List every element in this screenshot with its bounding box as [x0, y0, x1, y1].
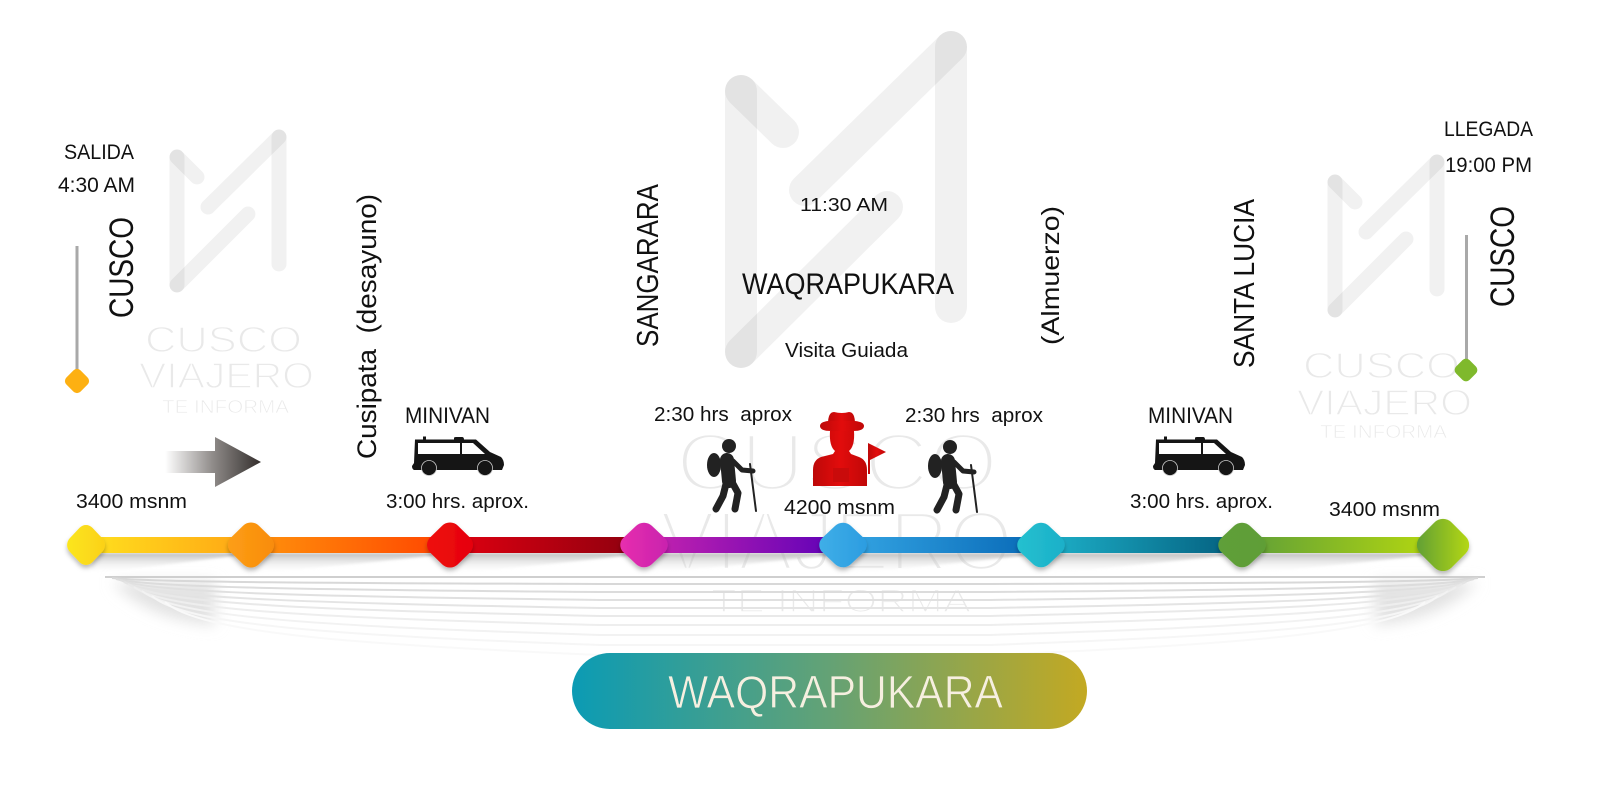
label: Cusipata: Cusipata (desayuno) — [352, 194, 382, 459]
text: departure time: SALIDA — [64, 141, 134, 164]
label: hike duration right: 2:30 hrs aprox — [905, 405, 1043, 427]
icon: minivan left — [412, 436, 504, 476]
watermark: right logo: TE INFORMA — [1320, 422, 1447, 442]
diamond markers — [63, 514, 1474, 576]
watermark: right logo — [1297, 162, 1472, 442]
icon: guide with flag — [813, 412, 886, 486]
icon: hiker right — [928, 440, 977, 512]
label: minivan left: MINIVAN — [405, 403, 490, 428]
label: duration left: 3:00 hrs. aprox. — [386, 491, 529, 513]
pin: arrival marker — [1453, 235, 1479, 383]
text: guided visit: Visita Guiada — [785, 340, 909, 362]
watermark: center logo: CUSCO — [676, 417, 998, 508]
watermark: center logo — [660, 47, 1013, 619]
fanned shadow lines under the timeline — [105, 577, 1485, 655]
text: arrival time: 19:00 PM — [1445, 154, 1532, 177]
watermark: left logo: VIAJERO — [139, 355, 314, 396]
label: minivan right: MINIVAN — [1148, 403, 1233, 428]
label: duration right: 3:00 hrs. aprox. — [1130, 491, 1273, 513]
text: arrival time: LLEGADA — [1444, 118, 1533, 141]
watermark: center logo: TE INFORMA — [711, 583, 972, 619]
watermark: left logo: CUSCO — [145, 319, 302, 360]
label: hike duration left: 2:30 hrs aprox — [654, 404, 792, 426]
segment shadows — [92, 553, 1440, 574]
watermark: center logo: VIAJERO — [660, 494, 1013, 588]
label: altitude summit: 4200 msnm — [784, 497, 895, 519]
arrow: direction — [165, 437, 261, 487]
label: Cusco end: CUSCO — [1484, 206, 1522, 307]
label: Santa Lucia: SANTA LUCIA — [1229, 198, 1261, 368]
text: arrival time — [1444, 118, 1533, 177]
label: Sangarara: SANGARARA — [630, 184, 665, 347]
pin: departure marker — [63, 246, 91, 395]
text: arrival time at Waqrapukara: 11:30 AM — [800, 195, 888, 215]
text: departure time — [58, 141, 135, 197]
icon: hiker left — [707, 439, 756, 511]
segment bars — [90, 537, 1442, 553]
timeline — [63, 514, 1474, 576]
title pill: WAQRAPUKARA — [668, 666, 1003, 718]
title pill — [572, 653, 1087, 729]
watermark: left logo — [139, 137, 314, 417]
label: altitude end: 3400 msnm — [1329, 499, 1440, 521]
label: altitude start: 3400 msnm — [76, 491, 187, 513]
heading: Waqrapukara: WAQRAPUKARA — [742, 268, 954, 301]
watermark: right logo: VIAJERO — [1297, 382, 1472, 423]
watermark: left logo: TE INFORMA — [162, 397, 289, 417]
label: Almuerzo: (Almuerzo) — [1037, 206, 1065, 345]
icon: minivan right — [1153, 436, 1245, 476]
text: departure time: 4:30 AM — [58, 174, 135, 197]
label: Cusco start: CUSCO — [103, 217, 141, 318]
watermark: right logo: CUSCO — [1303, 345, 1460, 386]
